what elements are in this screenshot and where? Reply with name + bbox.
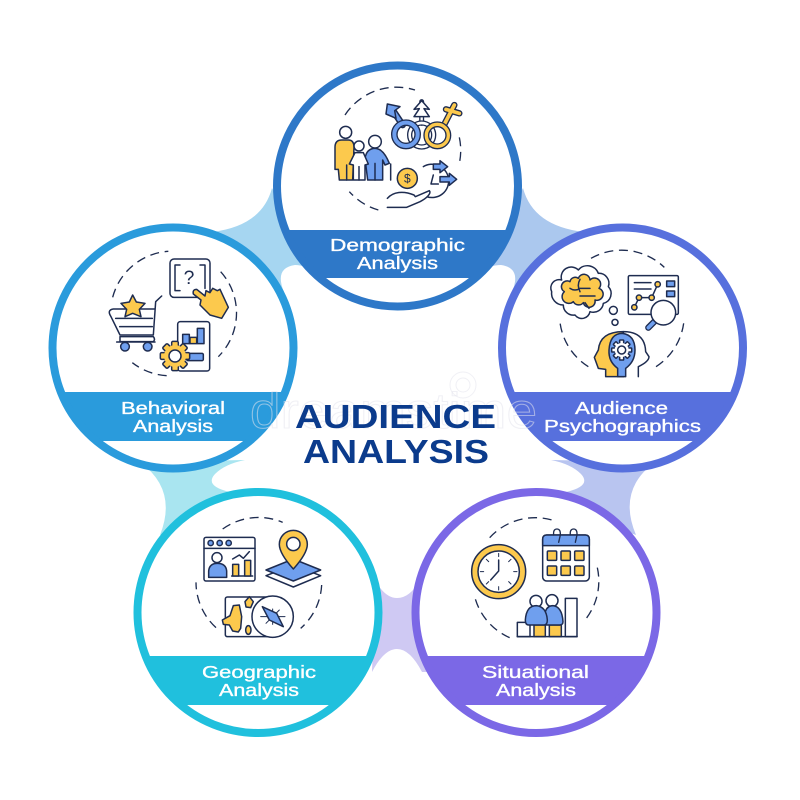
panel ring [277, 66, 518, 306]
panel ring [502, 228, 743, 468]
panel ring [416, 492, 656, 733]
panel: geographic analysis [130, 492, 385, 733]
label band [514, 392, 730, 441]
panel background [416, 492, 656, 732]
icon: situation [472, 518, 599, 638]
label: geographic analysis: Analysis [219, 680, 299, 700]
title [295, 398, 496, 470]
connector: psychographics to situational [551, 460, 655, 535]
icon: demographics: $ [404, 172, 411, 186]
icon: psychographics [551, 250, 684, 377]
connector: demographic to psychographics [477, 188, 584, 292]
watermark: dreamstime [250, 383, 537, 439]
icon: geography [196, 517, 322, 637]
panel background [53, 228, 293, 468]
title: ANALYSIS [303, 433, 489, 470]
icon: behavior [109, 251, 237, 376]
label band [290, 230, 506, 278]
label: behavioral analysis: Analysis [133, 416, 213, 436]
panel background [502, 228, 742, 468]
panel background [138, 492, 378, 732]
label band [150, 656, 366, 705]
panel ring [52, 228, 294, 468]
connector: geographic to situational [372, 580, 428, 672]
label band [65, 392, 281, 441]
panel: audience psychographics [495, 228, 750, 468]
label: behavioral analysis [121, 398, 225, 436]
label: audience psychographics [544, 398, 701, 436]
panel: demographic analysis [270, 66, 525, 306]
label: demographic analysis [330, 235, 465, 273]
label band [428, 656, 644, 705]
connector: behavioral to geographic [140, 460, 245, 535]
panel background [278, 66, 518, 306]
label: behavioral analysis: Behavioral [121, 398, 225, 418]
icon: demographics [335, 87, 461, 210]
panel: situational analysis [408, 492, 663, 733]
label: situational analysis [482, 662, 589, 700]
panel ring [138, 492, 378, 733]
title: AUDIENCE [295, 398, 496, 435]
label: audience psychographics: Audience [575, 398, 668, 418]
icon: behavior: ? [184, 268, 195, 289]
label: audience psychographics: Psychographics [544, 416, 701, 436]
label: demographic analysis: Analysis [357, 253, 438, 273]
label: demographic analysis: Demographic [330, 235, 465, 255]
connector: demographic to behavioral [212, 188, 318, 292]
label: geographic analysis: Geographic [202, 662, 316, 682]
label: geographic analysis [202, 662, 316, 700]
panel: behavioral analysis [45, 228, 300, 468]
label: situational analysis: Situational [482, 662, 589, 682]
label: situational analysis: Analysis [496, 680, 576, 700]
